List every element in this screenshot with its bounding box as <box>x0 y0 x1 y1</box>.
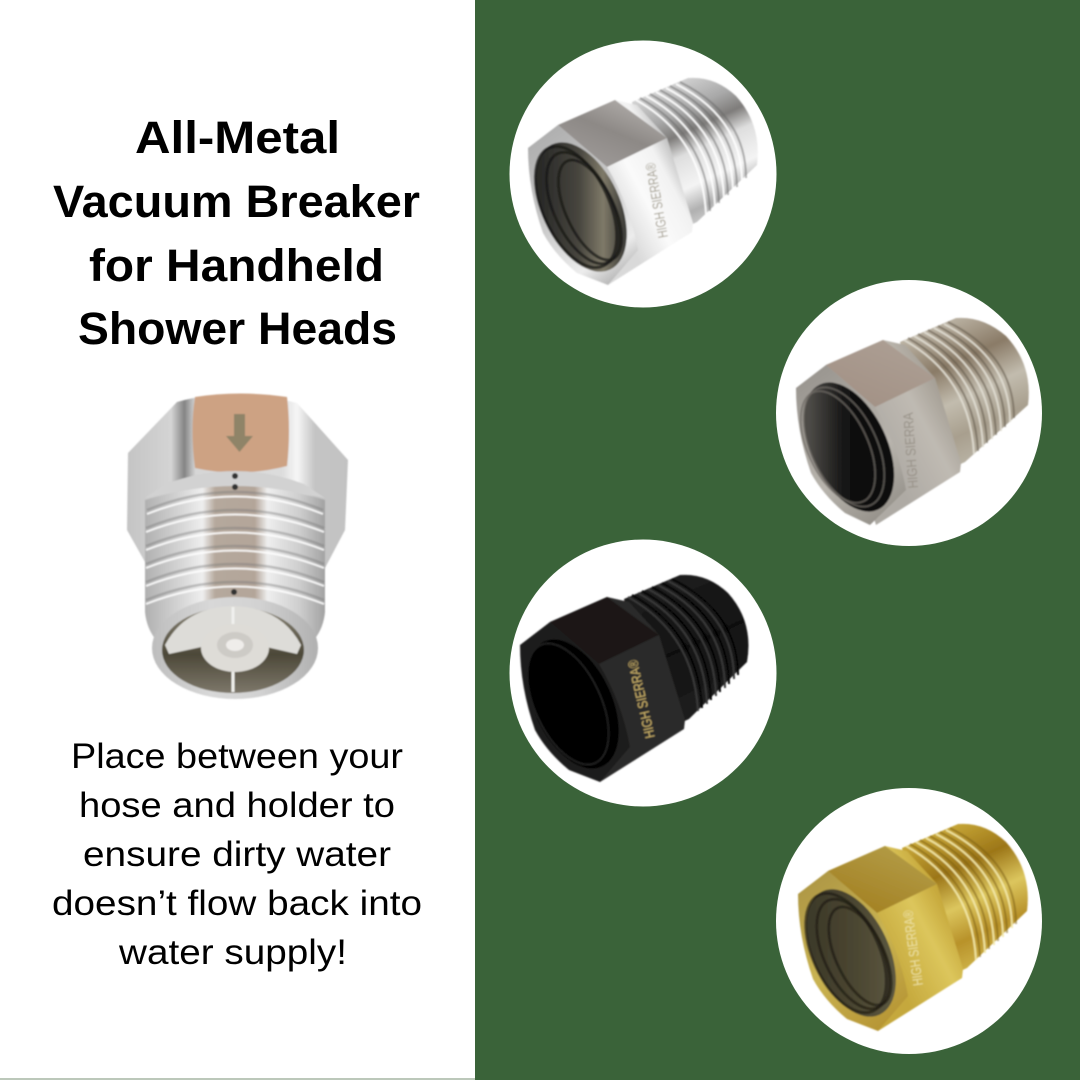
heading: Vacuum Breaker <box>53 176 420 227</box>
body text: ensure dirty water <box>83 835 391 874</box>
heading: Shower Heads <box>78 303 397 354</box>
product image: brushed nickel fitting <box>785 318 1029 526</box>
threaded barrel <box>145 486 325 668</box>
heading: All-Metal <box>135 112 340 163</box>
left white panel <box>0 0 475 1080</box>
green right panel <box>475 0 1080 1080</box>
white valve insert <box>165 606 301 654</box>
product image: vacuum breaker, front view with arrow <box>127 394 348 699</box>
body text <box>52 737 422 972</box>
product image: chrome fitting <box>516 78 758 286</box>
thread ridges <box>146 492 324 604</box>
alignment dots <box>232 473 238 479</box>
product image: matte black fitting <box>508 575 748 783</box>
body text: doesn’t flow back into <box>52 884 422 923</box>
body text: Place between your <box>71 737 403 776</box>
product image: chrome fitting: HIGH SIERRA® <box>642 161 671 239</box>
outlet opening <box>162 607 304 693</box>
heading <box>53 112 420 354</box>
white circle: chrome fitting <box>510 40 776 308</box>
body text: hose and holder to <box>79 786 395 825</box>
hex body <box>127 394 348 568</box>
peach reflection patch <box>192 394 289 473</box>
outlet ring <box>152 597 318 699</box>
collar <box>145 471 325 498</box>
body text: water supply! <box>118 933 347 972</box>
arrow mark <box>226 414 253 452</box>
white circle: brushed nickel fitting <box>776 280 1042 546</box>
product image: polished brass fitting <box>788 824 1028 1031</box>
white circle: polished brass fitting <box>776 788 1042 1054</box>
product image: matte black fitting: HIGH SIERRA® <box>624 658 658 740</box>
product image: polished brass fitting: HIGH SIERRA® <box>899 909 926 987</box>
white circle: matte black fitting <box>510 540 776 806</box>
product image: brushed nickel fitting: HIGH SIERRA <box>900 411 921 489</box>
heading: for Handheld <box>89 240 384 291</box>
